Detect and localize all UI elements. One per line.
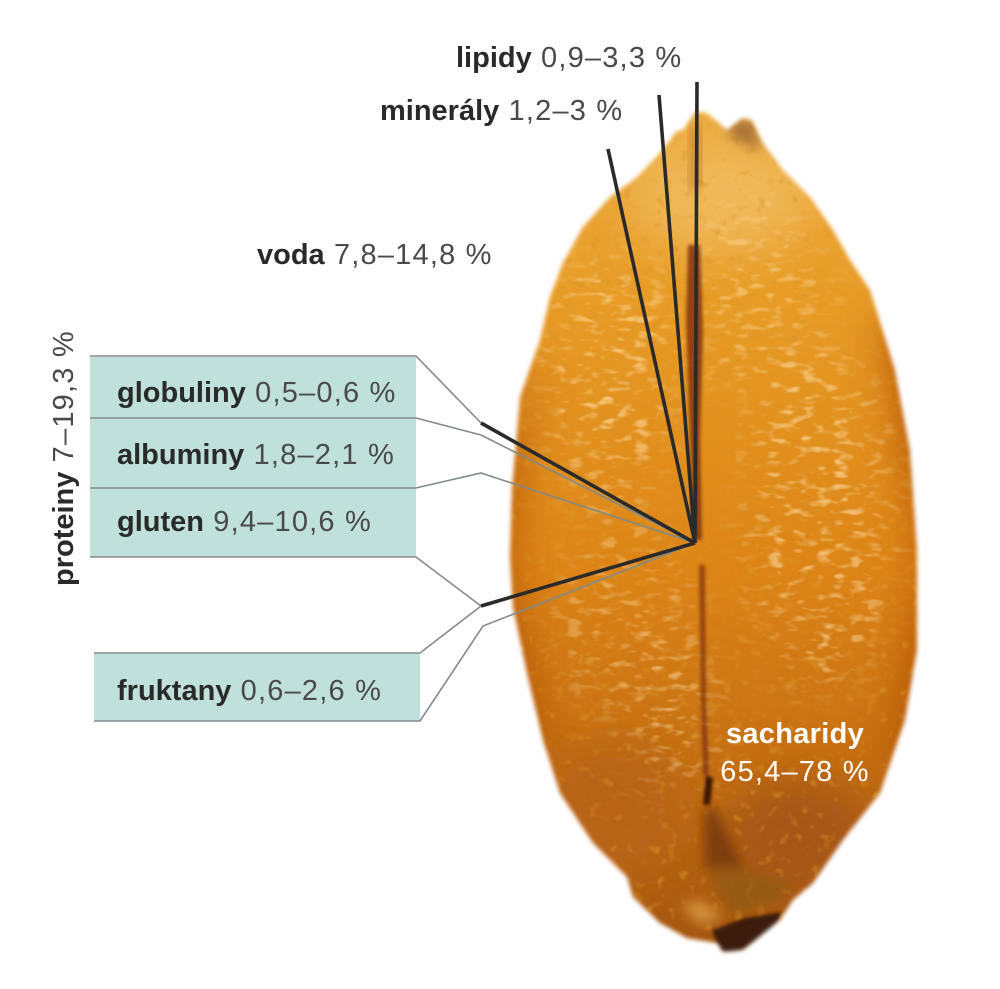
label: sacharidy: [720, 718, 870, 788]
icon: wheat grain: [506, 109, 921, 956]
label: lipidy: lipidy 0,9–3,3 %: [456, 42, 682, 74]
label: gluten: gluten 9,4–10,6 %: [117, 506, 372, 538]
teal panel: proteins: [90, 357, 416, 557]
label: voda: voda 7,8–14,8 %: [257, 239, 493, 271]
label: proteiny: proteiny 7–19,3 %: [48, 330, 80, 586]
label: globuliny: globuliny 0,5–0,6 %: [117, 377, 397, 409]
tip: [712, 912, 782, 955]
label: albuminy: albuminy 1,8–2,1 %: [117, 439, 395, 471]
crease: [686, 245, 795, 915]
leader lines: panels to grain: [90, 356, 695, 721]
teal panel: fructans: [94, 653, 420, 721]
pointer lines: dark: [481, 82, 697, 606]
label: minerály: minerály 1,2–3 %: [380, 95, 623, 127]
label: sacharidy: sacharidy: [726, 718, 864, 750]
label: sacharidy: 65,4–78 %: [720, 756, 870, 788]
shading: [510, 130, 918, 880]
label: fruktany: fruktany 0,6–2,6 %: [117, 675, 382, 707]
